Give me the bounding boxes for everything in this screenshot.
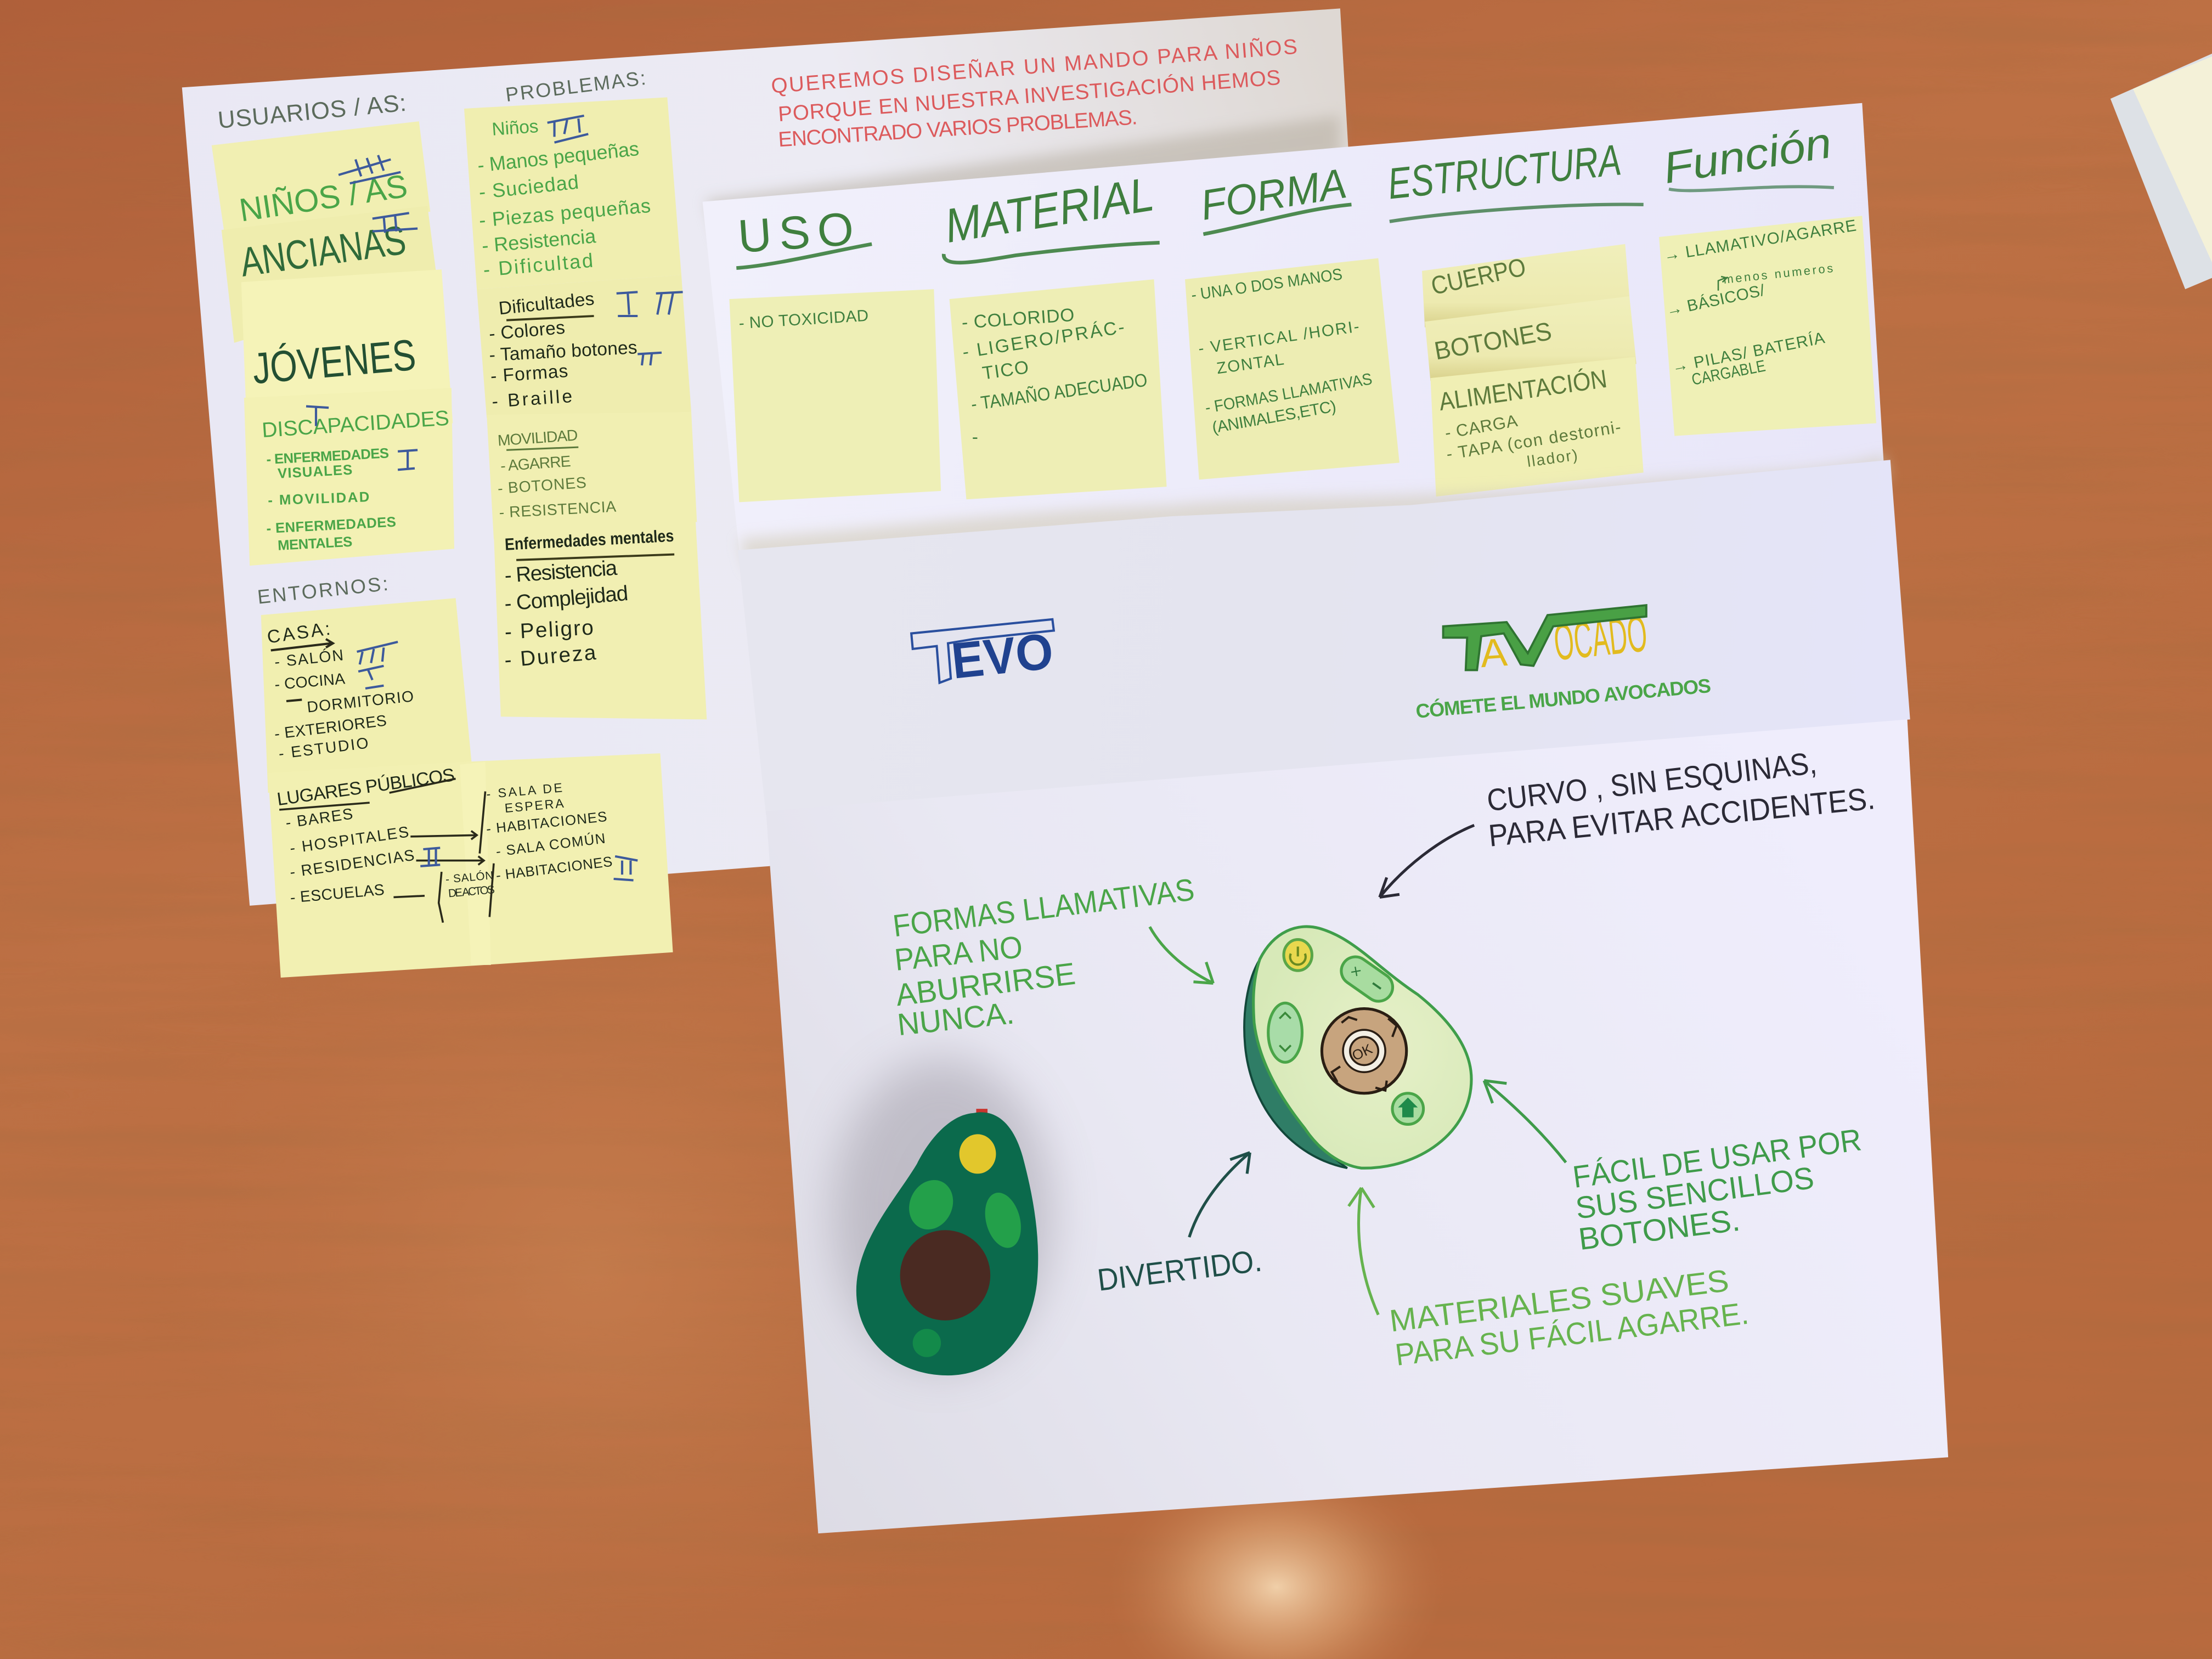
sticky note: lugares públicos: - HOSPITALES (289, 823, 410, 857)
column heading: forma: FORMA (1198, 160, 1350, 229)
sticky note: problemas niños: - Piezas pequeñas (478, 194, 652, 232)
sticky note: lugares públicos: - HABITACIONES (486, 809, 608, 837)
heading: problemas: PROBLEMAS: (504, 66, 647, 106)
panel: product description sheet (766, 719, 1948, 1533)
arrow: to top of the avocado (1380, 825, 1474, 897)
sticky note: función: → BÁSICOS/ (1664, 281, 1767, 320)
sticky note: movilidad: - RESISTENCIA (499, 498, 617, 521)
panel: logo sheet (738, 454, 1910, 815)
sticky note: material: - LIGERO/PRÁC- (961, 317, 1126, 363)
sticky note: dificultades: - Braille (491, 386, 573, 412)
sticky note: niños/as (212, 121, 430, 242)
sticky note: casa: - COCINA (274, 669, 346, 693)
annotation: curvo sin esquinas: PARA EVITAR ACCIDENTES. (1487, 781, 1876, 853)
home button (1392, 1093, 1424, 1124)
sticky note: casa: DORMITORIO (306, 687, 415, 716)
arrow: to right of the avocado (1484, 1081, 1566, 1163)
sticky note: función: CARGABLE (1690, 357, 1767, 389)
arrow: to bottom of the avocado (1348, 1188, 1378, 1315)
annotation: fácil de usar: SUS SENCILLOS (1573, 1160, 1816, 1226)
heading: usuarios: USUARIOS / AS: (217, 89, 408, 134)
panel: research sheet with users, problems and environments (182, 8, 1355, 978)
sticky note: casa: - SALÓN (274, 646, 344, 670)
sticky note: enfermedades mentales: - Resistencia (504, 556, 618, 588)
annotation: curvo sin esquinas (1485, 745, 1876, 853)
column heading: función: Función (1660, 118, 1835, 193)
shadow of the clay model (832, 1058, 1052, 1368)
sticky note: función: menos numeros (1723, 261, 1833, 286)
clay left bean button (901, 1173, 961, 1237)
column heading: uso: USO (736, 202, 855, 262)
directional pad with OK button (1322, 1009, 1407, 1093)
sticky note: problemas niños: - Dificultad (482, 249, 594, 281)
annotation: curvo sin esquinas: CURVO , SIN ESQUINAS, (1485, 745, 1819, 817)
sticky note: ancianos/as (222, 206, 437, 343)
clay directional pad (900, 1230, 990, 1321)
illustration: avocado remote drawing (1244, 927, 1471, 1168)
red statement text: ENCONTRADO VARIOS PROBLEMAS. (777, 105, 1138, 151)
annotation: fácil de usar: BOTONES. (1577, 1203, 1742, 1256)
sticky note: niños/as: NIÑOS / AS (237, 167, 410, 229)
sticky note: jóvenes (241, 269, 453, 430)
sticky note: casa: - EXTERIORES (273, 712, 387, 742)
directional pad with OK button: OK (1350, 1041, 1375, 1064)
annotation: fácil de usar (1571, 1122, 1863, 1256)
sticky note: discapacidades: MENTALES (277, 534, 353, 554)
annotation: materiales suaves: MATERIALES SUAVES (1387, 1263, 1731, 1338)
sticky note: movilidad: - BOTONES (497, 473, 587, 497)
soft shadow under the chart sheet (706, 116, 1340, 242)
column heading: material: MATERIAL (941, 167, 1157, 253)
sticky note: casa: CASA: (266, 619, 331, 647)
sticky note: dificultades: - Colores (488, 318, 566, 345)
sticky note: alimentación (1430, 357, 1644, 496)
red statement text (770, 35, 1298, 151)
sticky note: lugares públicos: - SALA DE (486, 780, 563, 801)
heading: entornos: ENTORNOS: (256, 572, 389, 608)
sticky note: uso: - NO TOXICIDAD (738, 307, 869, 332)
sticky note: enfermedades mentales: Enfermedades mentales (504, 526, 674, 554)
sticky note: cuerpo: CUERPO (1429, 252, 1528, 300)
sticky note: forma: (ANIMALES,ETC) (1211, 397, 1338, 437)
arrow: to side of the avocado (1189, 1153, 1250, 1237)
sticky note: lugares públicos (268, 753, 673, 978)
sticky note: función (1659, 216, 1876, 436)
clay right bean button (979, 1189, 1026, 1252)
sticky note: discapacidades: DISCAPACIDADES (261, 407, 450, 442)
arrow: to left of the avocado (1150, 927, 1213, 983)
sticky note: enfermedades mentales (494, 519, 707, 719)
sticky note: alimentación: - CARGA (1443, 411, 1519, 443)
annotation: divertido: DIVERTIDO. (1096, 1243, 1263, 1297)
sticky note: forma (1185, 258, 1400, 479)
sticky note: lugares públicos: - HABITACIONES (495, 854, 613, 884)
sticky note: ancianos/as: ANCIANAS (238, 216, 409, 285)
sticky note: lugares públicos: ESPERA (504, 796, 565, 815)
sticky note: discapacidades: VISUALES (277, 462, 353, 482)
annotation: formas llamativas (891, 872, 1196, 1042)
sticky note: alimentación: ALIMENTACIÓN (1437, 364, 1609, 416)
sticky note: material (950, 279, 1167, 499)
logo: TEVO: EVO (949, 622, 1056, 690)
sticky note: casa: - ESTUDIO (278, 734, 369, 762)
sticky note: enfermedades mentales: - Complejidad (504, 582, 629, 616)
sticky note: dificultades: - Tamaño botones (489, 337, 637, 365)
sticky note: lugares públicos: - SALA COMÚN (495, 831, 606, 860)
illustration: clay avocado model (856, 1109, 1038, 1375)
logo: TAVOCADO (1443, 605, 1650, 676)
sticky note: discapacidades: - ENFERMEDADES (266, 445, 390, 467)
sticky note: jóvenes: JÓVENES (251, 330, 417, 393)
clay home button (913, 1329, 941, 1357)
power button (1284, 940, 1312, 970)
annotation: materiales suaves (1387, 1263, 1751, 1372)
sticky note: lugares públicos: DE ACTOS (448, 883, 495, 900)
sticky note: forma: ZONTAL (1216, 351, 1285, 377)
annotation: materiales suaves: PARA SU FÁCIL AGARRE. (1393, 1296, 1751, 1372)
sticky note: forma: - VERTICAL /HORI- (1197, 318, 1361, 358)
volume button: × (1346, 961, 1365, 982)
annotation: formas llamativas: NUNCA. (896, 995, 1016, 1042)
sticky note: lugares públicos: - ESCUELAS (289, 881, 385, 906)
sticky note: casa (261, 598, 472, 793)
sticky note: lugares públicos: LUGARES PÚBLICOS (275, 764, 456, 810)
sticky note: problemas niños: - Resistencia (481, 224, 597, 257)
sticky note: discapacidades (244, 388, 454, 566)
sticky note: material: - COLORIDO (961, 305, 1075, 333)
clay power button (960, 1134, 996, 1173)
column heading: estructura (1385, 135, 1644, 222)
sticky note: material: - (972, 427, 978, 447)
sticky note: botones: BOTONES (1432, 317, 1554, 365)
sticky note: problemas niños: - Suciedad (478, 171, 580, 204)
logo: TEVO (911, 619, 1056, 690)
sticky note: dificultades: Dificultades (498, 289, 595, 319)
sticky note: discapacidades: - MOVILIDAD (268, 489, 370, 509)
logo: TAVOCADO: OCADO (1551, 605, 1650, 671)
sticky note: dificultades: - Formas (490, 361, 568, 387)
sticky note: enfermedades mentales: - Peligro (504, 616, 594, 644)
sticky note: forma: - FORMAS LLAMATIVAS (1204, 370, 1374, 417)
sticky note: movilidad (487, 412, 697, 539)
channel button (1268, 1003, 1302, 1062)
sticky note: material: - TAMAÑO ADECUADO (970, 369, 1149, 415)
sticky note: lugares públicos: - SALÓN (445, 869, 494, 886)
annotation: formas llamativas: ABURRIRSE (894, 956, 1077, 1012)
white block object at top right (2111, 54, 2212, 289)
sticky note: función: → PILAS/ BATERÍA (1671, 329, 1826, 376)
volume button (1336, 951, 1398, 1007)
sticky note: enfermedades mentales: - Dureza (504, 641, 597, 672)
sticky note: función: → LLAMATIVO/AGARRE (1662, 217, 1858, 265)
sticky note: movilidad: - AGARRE (500, 452, 572, 475)
sticky note: lugares públicos: - BARES (284, 805, 354, 831)
annotation: formas llamativas: FORMAS LLAMATIVAS (891, 872, 1196, 943)
sticky note: movilidad: MOVILIDAD (497, 426, 578, 449)
logo: TAVOCADO: A (1479, 630, 1509, 676)
red statement text: QUEREMOS DISEÑAR UN MANDO PARA NIÑOS (770, 35, 1298, 98)
sticky note: dificultades (477, 275, 691, 417)
annotation: formas llamativas: PARA NO (893, 929, 1024, 977)
logo tagline: CÓMETE EL MUNDO AVOCADOS (1415, 674, 1712, 723)
sticky note: botones (1425, 296, 1637, 381)
sticky note: uso (729, 289, 941, 502)
column heading: estructura: ESTRUCTURA (1385, 135, 1623, 208)
sticky note: discapacidades: - ENFERMEDADES (266, 515, 397, 537)
sticky note: forma: - UNA O DOS MANOS (1190, 265, 1344, 304)
sticky note: problemas niños (464, 97, 681, 289)
sticky note: problemas niños: - Manos pequeñas (476, 137, 640, 177)
sticky note: alimentación: - TAPA (con destorni- (1445, 417, 1622, 464)
sticky note: alimentación: llador) (1526, 446, 1578, 470)
sticky note: cuerpo (1422, 244, 1631, 328)
sticky note: lugares públicos: - RESIDENCIAS (289, 846, 415, 881)
panel: morphological chart sheet (703, 103, 1884, 565)
annotation: fácil de usar: FÁCIL DE USAR POR (1571, 1122, 1863, 1194)
sticky note: material: TICO (981, 357, 1030, 384)
red statement text: PORQUE EN NUESTRA INVESTIGACIÓN HEMOS (777, 66, 1282, 126)
sticky note: problemas niños: Niños (491, 116, 539, 140)
